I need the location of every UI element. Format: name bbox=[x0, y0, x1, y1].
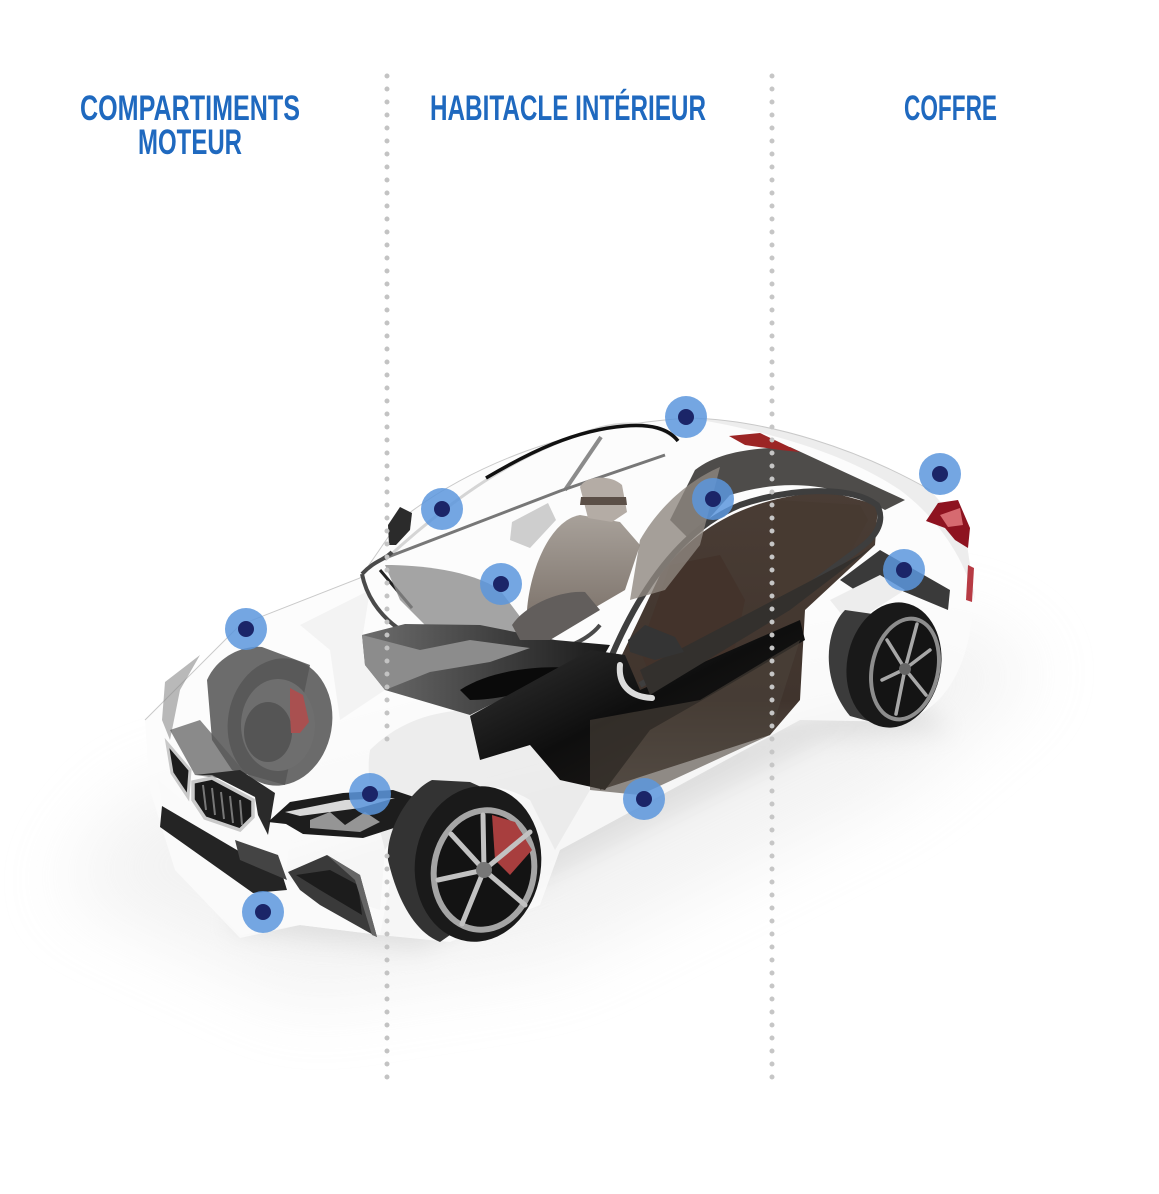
rear wheel bbox=[829, 595, 951, 735]
door handle bbox=[620, 665, 652, 698]
door lower panel bbox=[590, 640, 800, 795]
rear seats and door cavity bbox=[600, 492, 878, 790]
headlight bbox=[268, 790, 423, 838]
heading: compartiments moteur: MOTEUR bbox=[138, 123, 242, 162]
engine firewall panel bbox=[362, 624, 610, 715]
translucent car body bbox=[145, 418, 975, 942]
car shadow bbox=[60, 620, 1040, 1000]
heading: habitacle intérieur: HABITACLE INTÉRIEUR bbox=[430, 88, 706, 128]
door mirror bbox=[628, 625, 684, 660]
kidney grille right bbox=[193, 778, 253, 830]
car illustration bbox=[145, 418, 975, 950]
high brake light bbox=[729, 433, 800, 452]
hood edge dark bbox=[195, 770, 275, 835]
wing mirror bbox=[388, 507, 412, 545]
engine bay front bbox=[170, 720, 260, 790]
marker: trunk bbox=[883, 549, 925, 591]
centre screen bbox=[510, 503, 556, 548]
divider left bbox=[384, 76, 390, 1078]
door belt strip bbox=[640, 545, 875, 695]
rear seat backrest bbox=[770, 500, 868, 600]
marker: door sill bbox=[623, 778, 665, 820]
rear chassis bar bbox=[840, 550, 950, 610]
front seat bbox=[512, 467, 720, 640]
bumper air duct bbox=[288, 855, 377, 937]
marker: bonnet bbox=[225, 608, 267, 650]
front wheel bbox=[388, 778, 551, 950]
divider right bbox=[770, 76, 774, 1078]
bonnet ghost detail bbox=[162, 655, 200, 740]
marker: headlight bbox=[349, 773, 391, 815]
dashboard bbox=[385, 565, 530, 650]
front bumper white bbox=[158, 780, 400, 935]
red brake caliper bbox=[290, 688, 309, 733]
marker: rear cabin bbox=[692, 478, 734, 520]
tail light bbox=[926, 500, 974, 602]
marker: dashboard bbox=[480, 563, 522, 605]
heading: compartiments moteur: COMPARTIMENTS bbox=[80, 89, 300, 128]
red front caliper bbox=[492, 815, 532, 875]
kidney grille left bbox=[167, 743, 190, 797]
rear roof panel bbox=[670, 447, 905, 540]
marker: windshield bbox=[421, 488, 463, 530]
door lower black body bbox=[470, 620, 805, 790]
door window frame bbox=[612, 491, 880, 685]
marker: roof bbox=[665, 396, 707, 438]
windshield and roof frame bbox=[362, 424, 678, 656]
second seat bbox=[640, 555, 745, 700]
lower front intake bbox=[160, 806, 287, 893]
ghost front wheel and brake bbox=[207, 647, 342, 794]
marker: rear top bbox=[919, 453, 961, 495]
heading: compartiments moteur bbox=[80, 89, 300, 162]
marker: front bumper bbox=[242, 891, 284, 933]
heading: coffre: COFFRE bbox=[904, 89, 997, 128]
